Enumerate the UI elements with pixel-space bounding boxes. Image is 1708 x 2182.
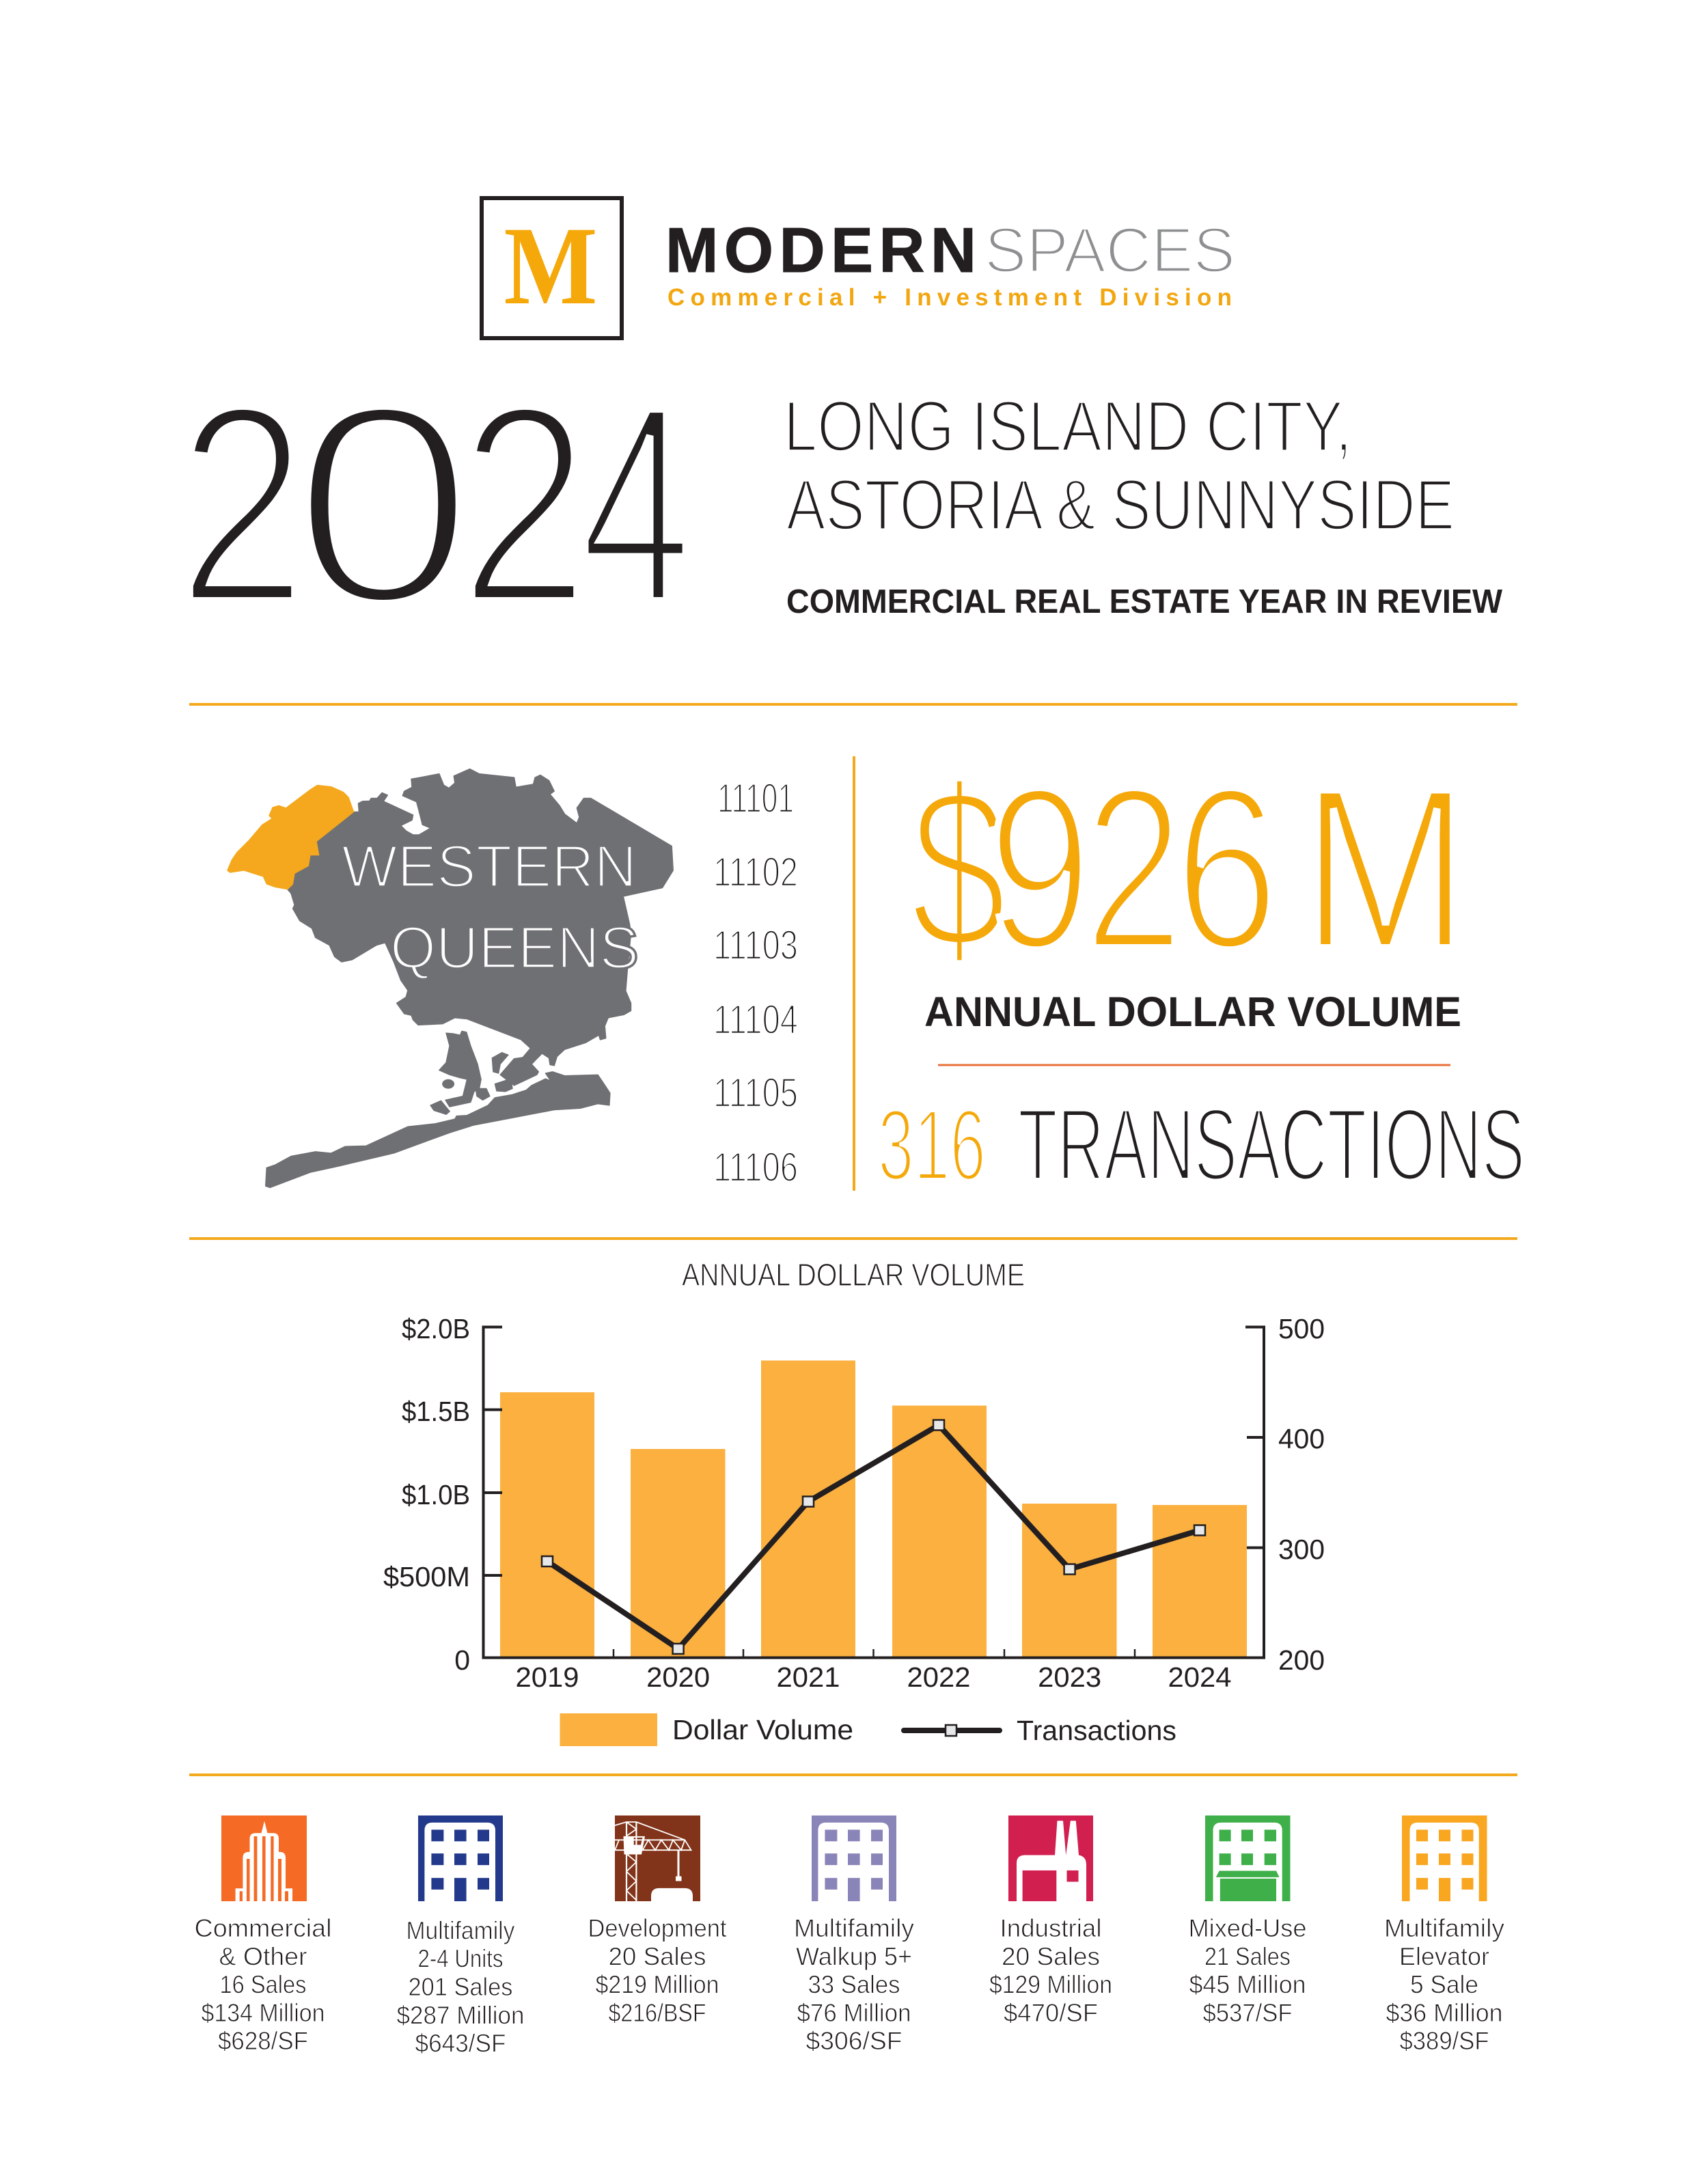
text: Development stats: $219 Million	[596, 1971, 719, 1999]
year labels: 2023	[1038, 1661, 1101, 1693]
line: transactions	[547, 1425, 1200, 1649]
left axis labels: $1.0B	[402, 1479, 470, 1510]
property type: Development	[588, 1816, 727, 2027]
text: Development stats	[588, 1914, 727, 2027]
text: Multifamily 2-4 Units stats: 201 Sales	[409, 1973, 512, 2001]
year 2024: 4	[581, 346, 691, 663]
zip code list: 11101	[717, 775, 794, 821]
logo: Modern Spaces	[482, 198, 1235, 338]
axes and ticks	[484, 1327, 1264, 1657]
text: Multifamily Walkup stats: $306/SF	[806, 2027, 902, 2055]
stat: $926 M dollar volume	[910, 739, 1470, 997]
zip code list: 11106	[713, 1144, 798, 1190]
zip code list: 11104	[713, 997, 798, 1042]
text: Multifamily 2-4 Units stats: $643/SF	[415, 2029, 506, 2057]
map: highlighted Western Queens area	[228, 785, 354, 889]
property type: Mixed-Use	[1189, 1816, 1306, 2027]
text: Multifamily 2-4 Units stats: $287 Million	[396, 2001, 525, 2029]
text: Development stats: Development	[588, 1914, 727, 1942]
text: Multifamily Elevator stats: 5 Sale	[1410, 1971, 1478, 1999]
text: Development stats: 20 Sales	[608, 1942, 706, 1970]
icon: storefront building	[1205, 1816, 1290, 1901]
stat: $926 M dollar volume: 2	[1084, 739, 1183, 997]
stat: $926 M dollar volume: M	[1301, 739, 1470, 997]
text: Commercial & Other stats: $134 Million	[201, 1999, 325, 2027]
right axis labels	[1278, 1313, 1325, 1676]
left axis labels: $2.0B	[402, 1313, 470, 1344]
text: Multifamily 2-4 Units stats	[396, 1916, 525, 2057]
property type: Industrial	[989, 1816, 1112, 2027]
icon: amber apartment building	[1402, 1816, 1487, 1901]
text: Industrial stats: $470/SF	[1004, 1999, 1098, 2027]
year 2024: 0	[292, 346, 474, 663]
text: Multifamily Walkup stats	[794, 1914, 914, 2055]
text: Mixed-Use stats: 21 Sales	[1204, 1942, 1291, 1970]
zip code list: 11102	[713, 849, 798, 895]
logo mark box	[482, 198, 622, 338]
text: Commercial & Other stats: $628/SF	[218, 2027, 308, 2055]
stat: $926 M dollar volume: 9	[988, 739, 1092, 997]
icon: blue apartment building	[418, 1816, 503, 1901]
property type: Commercial & Other	[194, 1816, 332, 2055]
left axis labels: 0	[454, 1644, 470, 1676]
icon: factory	[1008, 1816, 1093, 1901]
text: Commercial & Other stats	[194, 1914, 332, 2055]
text: Mixed-Use stats: $537/SF	[1202, 1999, 1293, 2027]
stat: 316: 316	[878, 1089, 986, 1202]
text: Industrial stats: Industrial	[1000, 1914, 1101, 1942]
property type: Multifamily Elevator	[1384, 1816, 1504, 2055]
text: Multifamily Elevator stats: Multifamily	[1384, 1914, 1504, 1942]
text: Commercial & Other stats: Commercial	[194, 1914, 332, 1942]
logo wordmark SPACES: SPACES	[984, 215, 1235, 286]
left axis labels	[383, 1313, 470, 1676]
icon: skyscraper	[221, 1816, 307, 1901]
text: Multifamily Elevator stats: $389/SF	[1399, 2027, 1489, 2055]
left axis labels: $1.5B	[402, 1396, 470, 1427]
year labels: 2024	[1168, 1661, 1231, 1693]
text: Development stats: $216/BSF	[608, 1999, 706, 2027]
heading: Long Island City, Astoria & Sunnyside	[784, 387, 1455, 545]
logo tagline: Commercial + Investment Division	[667, 284, 1232, 311]
text: Commercial & Other stats: & Other	[219, 1942, 307, 1970]
logo wordmark MODERN: MODERN	[665, 215, 976, 286]
heading line 2: ASTORIA & SUNNYSIDE	[786, 465, 1455, 545]
text: Multifamily Walkup stats: Walkup 5+	[796, 1942, 912, 1970]
legend: Dollar Volume	[672, 1714, 853, 1745]
text: Multifamily Elevator stats	[1384, 1914, 1504, 2055]
year labels: 2021	[776, 1661, 840, 1693]
text: Multifamily 2-4 Units stats: 2-4 Units	[418, 1945, 503, 1973]
combo chart: dollar volume and transactions	[383, 1313, 1325, 1746]
subheading: COMMERCIAL REAL ESTATE YEAR IN REVIEW	[786, 583, 1503, 620]
text: Mixed-Use stats	[1189, 1914, 1306, 2027]
map: Western Queens	[228, 769, 673, 1187]
line markers	[542, 1420, 1205, 1654]
bars: dollar volume	[500, 1361, 1247, 1657]
text: Commercial & Other stats: 16 Sales	[220, 1971, 306, 1999]
heading line 1: LONG ISLAND CITY,	[784, 387, 1352, 467]
text: Industrial stats	[989, 1914, 1112, 2027]
text: Industrial stats: 20 Sales	[1002, 1942, 1100, 1970]
right axis labels: 400	[1278, 1423, 1325, 1454]
zip code list: 11105	[713, 1070, 798, 1116]
text: Multifamily 2-4 Units stats: Multifamily	[406, 1916, 515, 1944]
map: Queens silhouette	[266, 769, 673, 1187]
map label: QUEENS: QUEENS	[390, 915, 639, 981]
text: Multifamily Elevator stats: Elevator	[1399, 1942, 1489, 1970]
chart title: ANNUAL DOLLAR VOLUME	[682, 1257, 1025, 1293]
year 2024	[178, 346, 691, 663]
text: Multifamily Elevator stats: $36 Million	[1386, 1999, 1503, 2027]
stat: $926 M dollar volume: 6	[1174, 739, 1279, 997]
legend	[560, 1713, 1176, 1746]
text: Mixed-Use stats: Mixed-Use	[1189, 1914, 1306, 1942]
right axis labels: 500	[1278, 1313, 1325, 1344]
year 2024: 2	[459, 346, 589, 663]
text: Mixed-Use stats: $45 Million	[1189, 1971, 1306, 1999]
zip code list	[713, 775, 798, 1190]
map label: WESTERN: WESTERN	[342, 833, 637, 900]
text: Multifamily Walkup stats: 33 Sales	[808, 1971, 900, 1999]
property type: Multifamily 2-4 Units	[396, 1816, 525, 2057]
logo mark box: M	[504, 204, 597, 328]
year labels	[515, 1661, 1231, 1693]
zip code list: 11103	[713, 922, 798, 968]
stat: $926 M dollar volume: $	[910, 739, 1007, 997]
year 2024: 2	[178, 346, 307, 663]
right axis labels: 300	[1278, 1534, 1325, 1565]
text: Industrial stats: $129 Million	[989, 1971, 1112, 1999]
text: Multifamily Walkup stats: Multifamily	[794, 1914, 914, 1942]
year labels: 2022	[907, 1661, 970, 1693]
text: Multifamily Walkup stats: $76 Million	[797, 1999, 911, 2027]
icon: purple apartment building	[812, 1816, 896, 1901]
year labels: 2019	[515, 1661, 579, 1693]
legend: Transactions	[1017, 1715, 1176, 1746]
year labels: 2020	[646, 1661, 710, 1693]
stat label: annual dollar volume: ANNUAL DOLLAR VOLUME	[924, 989, 1461, 1035]
property type: Multifamily Walkup 5+	[794, 1816, 914, 2055]
icon: crane	[615, 1816, 700, 1901]
right axis labels: 200	[1278, 1644, 1325, 1676]
left axis labels: $500M	[383, 1561, 470, 1592]
